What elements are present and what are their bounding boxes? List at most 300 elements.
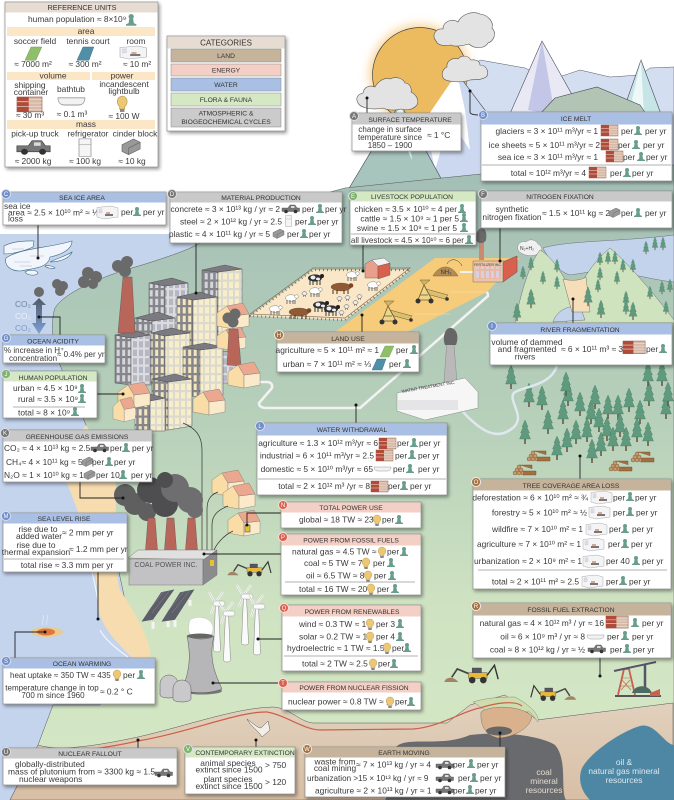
body text: ≈ 1 °C <box>427 130 450 140</box>
row total: per yr <box>410 481 432 491</box>
panel M: sea level rise <box>2 512 128 572</box>
row total: total ≈ 16 TW ≈ 20 <box>299 584 367 594</box>
panel H: land use <box>274 330 419 372</box>
row plant species: plant species <box>204 774 252 784</box>
badge R <box>472 602 480 610</box>
scene: sun <box>370 25 470 125</box>
scene: oil and gas mineral resources: oil & <box>616 757 633 767</box>
badge V: V <box>186 747 190 753</box>
row plutonium: globally-distributed <box>15 759 85 769</box>
scene: dam <box>563 277 590 312</box>
row forestry: per yr <box>636 508 658 518</box>
volume and power references: ≈ 0.1 m³ <box>57 109 88 119</box>
scene: atmospheric CO2 exchange <box>15 287 46 334</box>
row deforestation: per yr <box>635 492 657 502</box>
row waste from coal mining: per yr <box>477 760 499 770</box>
scene: lake and reservoir <box>543 235 674 282</box>
volume and power references: container <box>14 87 48 97</box>
row total: per yr <box>629 576 651 586</box>
legend: energy: ENERGY <box>212 68 241 74</box>
row total <box>511 167 654 178</box>
row total: per <box>610 168 622 178</box>
row animal species: > 750 <box>265 760 287 770</box>
scene: ammonia pile: NH₃ <box>440 270 452 276</box>
panel R: fossil fuel extraction <box>472 602 671 658</box>
scene: fertilizer factory: FERTILIZER INC. <box>474 263 502 267</box>
badge C <box>2 190 10 198</box>
badge F <box>478 190 488 198</box>
volume and power references: ≈ 100 W <box>108 111 140 121</box>
row all livestock: all livestock ≈ 4.5 × 10¹⁰ ≈ 6 per <box>351 236 464 245</box>
mass band <box>7 119 155 129</box>
scene: solar panels <box>141 589 195 629</box>
heading: LAND USE <box>331 336 365 343</box>
area band <box>7 26 155 36</box>
panel S: ocean warming <box>2 656 155 704</box>
row total: total ≈ 2 TW ≈ 2.5 <box>302 658 368 668</box>
heading: HUMAN POPULATION <box>18 375 88 382</box>
row agriculture: per <box>608 539 620 549</box>
badge O: O <box>474 480 479 486</box>
row nuclear power: per <box>395 696 407 706</box>
volume and power bands: volume <box>40 70 67 80</box>
row nuclear power: nuclear power ≈ 0.8 TW ≈ 1 <box>288 696 391 706</box>
row wildfire: per yr <box>632 524 654 534</box>
mass references: ≈ 100 kg <box>69 156 101 166</box>
row natural gas <box>292 546 408 558</box>
row deforestation: per <box>613 492 625 502</box>
row forestry: forestry ≈ 5 × 10¹⁰ m² ≈ ½ <box>492 508 587 518</box>
scene: sea ice <box>4 241 72 275</box>
scene: center pivot irrigators <box>380 280 485 324</box>
row agriculture: agriculture ≈ 5 × 10¹¹ m² ≈ 1 <box>276 345 379 355</box>
row total: per yr <box>632 168 654 178</box>
row urbanization: per yr <box>480 773 502 783</box>
scene: oil and gas mineral resources: resources <box>606 775 642 785</box>
row animal species: extinct since 1500 <box>195 764 263 774</box>
row H+ concentration: ≈ 0.4% per yr <box>57 350 105 359</box>
row plant species: > 120 <box>265 777 287 787</box>
badge O <box>472 478 480 486</box>
row synthetic nitrogen fixation: ≈ 1.5 × 10¹¹ kg ≈ 2 <box>542 208 610 218</box>
row plastic: per <box>287 229 299 239</box>
scene: oil pump jack <box>614 662 661 697</box>
scene: brown ground <box>10 695 673 800</box>
badge K: K <box>3 431 7 437</box>
row agriculture: per yr <box>475 786 497 796</box>
scene: fossil bone <box>247 719 270 737</box>
row plant species: extinct since 1500 <box>195 781 263 791</box>
legend: atmospheric and biogeochemical cycles: ATMOSPHERIC & <box>199 110 254 118</box>
row ice sheets: per yr <box>643 140 665 150</box>
heading: POWER FROM FOSSIL FUELS <box>303 538 399 544</box>
row thermal expansion <box>2 540 128 557</box>
row hydroelectric: hydroelectric ≈ 1 TW ≈ 1.5 <box>287 643 385 653</box>
badge C: C <box>4 192 9 198</box>
badge P: P <box>281 535 285 541</box>
badge S <box>2 656 10 666</box>
heading: RIVER FRAGMENTATION <box>540 327 620 334</box>
row cattle: cattle ≈ 1.5 × 10⁹ ≈ 1 per 5 <box>360 214 459 224</box>
row plastic: per yr <box>309 229 331 239</box>
badge T: T <box>281 681 285 687</box>
body text: change in surface <box>358 125 422 134</box>
row CH4: per yr <box>114 457 136 467</box>
row wildfire: wildfire ≈ 7 × 10¹⁰ m² ≈ 1 <box>491 524 583 534</box>
row glaciers <box>495 125 667 136</box>
badge I: I <box>491 324 493 330</box>
panel Q: power from renewables <box>280 604 421 671</box>
row sea ice: sea ice ≈ 3 × 10¹¹ m³/yr ≈ 1 <box>498 152 598 162</box>
volume and power references: incandescent <box>99 79 149 89</box>
row solar <box>299 632 404 643</box>
row total <box>302 658 398 670</box>
row urbanization: per yr <box>642 556 664 566</box>
panel I: river fragmentation <box>488 322 672 365</box>
row total: total ≈ 2 × 10¹¹ m² ≈ 2.5 <box>492 576 579 586</box>
row total: total ≈ 2 × 10¹² m³ /yr ≈ 8 <box>278 481 370 491</box>
row agriculture: per yr <box>631 539 653 549</box>
panel K: greenhouse gas emissions <box>0 428 154 482</box>
row agriculture <box>477 538 653 551</box>
scene: atmospheric CO2 exchange: CO₂ <box>15 311 31 321</box>
scene: roads <box>257 290 488 408</box>
row added water: rise due to <box>18 524 58 534</box>
row global <box>299 514 403 526</box>
row dammed rivers <box>491 337 667 362</box>
row waste from coal mining: per <box>453 760 465 770</box>
badge R: R <box>474 604 479 610</box>
badge W: W <box>304 747 310 753</box>
row natural gas: per yr <box>642 618 664 628</box>
row coal: coal ≈ 5 TW ≈ 7 <box>304 558 363 568</box>
heading: NUCLEAR FALLOUT <box>58 751 122 758</box>
scene: water treatment plant: WATER TREATMENT INC. <box>401 380 456 394</box>
scene: forested hills <box>515 248 674 323</box>
row CO2 <box>4 443 154 453</box>
volume and power references: lightbulb <box>108 86 140 96</box>
scene: oil and gas mineral resources: natural gas mineral <box>588 766 660 776</box>
body text: temperature since <box>358 133 423 142</box>
volume and power references: shipping <box>14 80 46 90</box>
row thermal expansion: rise due to <box>16 540 56 550</box>
badge L: L <box>258 424 262 430</box>
area band: area <box>78 26 95 36</box>
row urbanization: per 40 <box>606 556 630 566</box>
scene: houses and second smokestack <box>113 303 260 536</box>
scene: river and water pipe <box>463 366 557 434</box>
row waste from coal mining: coal mining <box>314 763 357 773</box>
row oil: oil ≈ 6.5 TW ≈ 8 <box>306 570 365 580</box>
heading: LIVESTOCK POPULATION <box>371 194 453 201</box>
badge P <box>278 532 288 542</box>
row wildfire <box>491 523 654 536</box>
row agriculture: agriculture ≈ 1.3 × 10¹² m³/yr ≈ 6 <box>258 438 378 448</box>
scene: coal power plant smoke <box>114 472 203 521</box>
row total: per <box>606 576 618 586</box>
row agriculture <box>315 785 497 796</box>
area references: room <box>126 36 146 46</box>
scene: open pit mine <box>473 697 538 738</box>
scene: ocean <box>0 234 674 800</box>
heading: SEA ICE AREA <box>59 195 105 202</box>
heading: POWER FROM RENEWABLES <box>305 609 400 616</box>
row dammed rivers: ≈ 6 × 10¹¹ m³ ≈ 3 <box>561 344 623 354</box>
row H+ concentration: % increase in H⁺ <box>4 346 64 355</box>
row oil <box>500 631 654 642</box>
row domestic: domestic ≈ 5 × 10¹⁰ m³/yr ≈ 65 <box>261 464 373 474</box>
panel: categories legend <box>167 36 285 131</box>
row natural gas: per <box>387 546 399 556</box>
row ice sheets: ice sheets ≈ 5 × 10¹¹ m³/yr ≈ 2 <box>489 140 600 150</box>
panel D: material production <box>168 190 347 243</box>
row sea ice area loss: sea ice <box>4 201 31 211</box>
area references <box>14 36 151 69</box>
row coal: per <box>373 558 385 568</box>
row forestry: per <box>613 508 625 518</box>
badge A: A <box>352 114 356 120</box>
row domestic <box>261 464 440 474</box>
row industrial: industrial ≈ 6 × 10¹¹ m³/yr ≈ 2.5 <box>260 450 374 460</box>
row glaciers: glaciers ≈ 3 × 10¹¹ m³/yr ≈ 1 <box>495 126 598 136</box>
scene: trees <box>506 237 674 463</box>
badge G: G <box>4 336 9 342</box>
row urbanization <box>474 555 664 568</box>
heading: MATERIAL PRODUCTION <box>221 195 301 202</box>
badge B <box>478 110 488 120</box>
row urbanization <box>307 773 502 783</box>
scene: ammonia pile <box>433 260 474 276</box>
heading: EARTH MOVING <box>378 750 430 757</box>
scene: coal mineral resources <box>385 733 566 800</box>
row agriculture: agriculture ≈ 7 × 10¹⁰ m² ≈ 1 <box>477 539 581 549</box>
panel T: power from nuclear fission <box>278 678 421 710</box>
scene: city skyline <box>115 265 242 431</box>
row agriculture <box>258 438 441 449</box>
row dammed rivers: and fragmented <box>498 344 557 354</box>
heading: categories: CATEGORIES <box>200 38 252 48</box>
row N2O: per yr <box>131 470 153 480</box>
scene: oil and gas mineral resources <box>580 726 674 800</box>
row H+ concentration: concentration <box>9 354 57 363</box>
row agriculture: per <box>397 438 409 448</box>
row thermal expansion: ≈ 1.2 mm per yr <box>69 544 128 554</box>
row urban <box>283 359 411 370</box>
badge M: M <box>4 514 8 520</box>
row total <box>278 481 432 492</box>
mass references: ≈ 2000 kg <box>15 156 52 166</box>
row oil: per <box>374 570 386 580</box>
panel C: sea ice area <box>2 190 166 225</box>
row animal species <box>195 758 287 774</box>
volume and power references <box>14 79 149 121</box>
row added water: added water <box>16 531 62 541</box>
row coal <box>490 644 655 654</box>
area references: soccer field <box>14 36 57 46</box>
scene: power lines <box>183 423 233 553</box>
row synthetic nitrogen fixation: per <box>621 208 633 218</box>
heading: reference units: REFERENCE UNITS <box>48 3 117 12</box>
scene: land <box>10 165 674 800</box>
scene: N2+H2 cloud: N₂+H₂ <box>520 246 534 252</box>
area references: ≈ 10 m² <box>123 59 151 69</box>
row total: total ≈ 10¹² m³/yr ≈ 4 <box>511 168 586 178</box>
volume and power bands <box>7 70 155 80</box>
panel G: ocean acidity <box>2 334 105 363</box>
badge Q: Q <box>282 606 287 612</box>
row steel: steel ≈ 2 × 10¹² kg / yr ≈ 2.5 <box>180 216 282 226</box>
row coal: per <box>610 644 622 654</box>
row natural gas: natural gas ≈ 4.5 TW ≈ 6 <box>292 546 384 556</box>
row CO2: per <box>110 443 122 453</box>
heading: POWER FROM NUCLEAR FISSION <box>299 685 409 692</box>
row concrete: per yr <box>325 204 347 214</box>
row sea ice area loss: per <box>121 207 133 217</box>
scene: fertilizer factory <box>473 228 517 282</box>
row CH4: CH₄≈ 4 × 10¹¹ kg ≈ 5 <box>6 457 83 467</box>
badge B: B <box>481 113 485 119</box>
scene: atmospheric CO2 exchange: CO₂ <box>15 323 31 333</box>
volume and power references: ≈ 30 m³ <box>16 110 44 120</box>
row total: total ≈ 8 × 10⁹ <box>18 408 71 418</box>
row total: per <box>377 584 389 594</box>
row solar: per 4 <box>376 632 395 642</box>
row CO2: CO₂ ≈ 4 × 10¹³ kg ≈ 2.5 <box>4 443 91 453</box>
row concrete: concrete ≈ 3 × 10¹³ kg / yr ≈ 2 <box>170 204 280 214</box>
row added water: ≈ 2 mm per yr <box>62 528 114 538</box>
row sea ice area loss: per yr <box>143 207 165 217</box>
row N2O <box>4 470 153 480</box>
scene: barn <box>365 258 390 279</box>
panel V: contemporary extinction <box>184 744 295 794</box>
row rural: rural ≈ 3.5 × 10⁹ <box>18 394 79 404</box>
scene: ocean heat spot <box>31 615 63 637</box>
legend: flora and fauna: FLORA & FAUNA <box>200 97 253 104</box>
row oil: oil ≈ 6 × 10⁹ m³ / yr ≈ 8 <box>500 632 585 642</box>
mass references: pick-up truck <box>11 128 60 138</box>
row sea ice area loss: loss <box>8 214 23 224</box>
panel O: tree coverage area loss <box>472 478 671 589</box>
badge S: S <box>4 659 8 665</box>
scene: log piles <box>513 451 654 475</box>
area references: ≈ 300 m² <box>68 59 102 69</box>
badge H: H <box>277 333 281 339</box>
area references: ≈ 7000 m² <box>14 59 52 69</box>
badge Q <box>280 604 288 612</box>
volume and power references: bathtub <box>57 84 85 94</box>
badge N <box>278 500 288 510</box>
volume and power bands: power <box>111 70 134 80</box>
row urban: urban ≈ 4.5 × 10⁹ <box>13 383 78 393</box>
row sea ice: per <box>623 152 635 162</box>
row total: total rise ≈ 3.3 mm per yr <box>21 560 113 570</box>
panel J: human population <box>2 370 97 418</box>
legend: water: WATER <box>214 82 238 89</box>
heading: SURFACE TEMPERATURE <box>368 117 452 124</box>
row concrete <box>170 204 347 214</box>
row forestry <box>492 506 658 519</box>
row CO2: per yr <box>132 443 154 453</box>
heading: OCEAN ACIDITY <box>27 338 79 346</box>
row coal: coal ≈ 8 × 10¹² kg / yr ≈ ½ <box>490 644 585 654</box>
row synthetic nitrogen fixation: per yr <box>645 208 667 218</box>
row concrete: per <box>302 204 314 214</box>
row urbanization: per <box>458 773 470 783</box>
body text: 1850 – 1900 <box>368 141 413 150</box>
row glaciers: per <box>621 126 633 136</box>
heading: TREE COVERAGE AREA LOSS <box>523 483 620 490</box>
mass references: refrigerator <box>68 128 109 138</box>
row temperature change: temperature change in top <box>5 684 99 692</box>
row coal: per yr <box>633 644 655 654</box>
heading: NITROGEN FIXATION <box>526 194 594 201</box>
row chicken: chicken ≈ 3.5 × 10¹⁰ ≈ 4 per <box>354 204 457 214</box>
row CH4: per <box>92 457 104 467</box>
panel: reference units <box>5 2 158 167</box>
badge N: N <box>281 503 285 509</box>
mass references: ≈ 10 kg <box>118 156 146 166</box>
row deforestation: deforestation ≈ 6 × 10¹⁰ m² ≈ ¾ <box>472 492 589 502</box>
scene: water treatment plant <box>397 328 478 420</box>
heading: GREENHOUSE GAS EMISSIONS <box>26 434 129 441</box>
row dammed rivers: volume of dammed <box>491 337 563 347</box>
badge J: J <box>4 372 8 378</box>
badge U: U <box>4 750 8 756</box>
row deforestation <box>472 491 657 504</box>
row natural gas <box>480 616 664 628</box>
row H+ concentration <box>4 346 105 363</box>
row wind <box>298 619 404 630</box>
panel W: earth moving <box>302 744 505 797</box>
row domestic: per yr <box>418 464 440 474</box>
row urbanization: urbanization ≈ 2 × 10⁹ m² ≈ 1 <box>474 556 582 566</box>
panel A: surface temperature <box>350 112 461 151</box>
row agriculture: agriculture ≈ 2 × 10¹³ kg / yr ≈ 1 <box>315 786 432 796</box>
row industrial <box>260 450 440 461</box>
area references: tennis court <box>66 36 110 46</box>
legend: atmospheric and biogeochemical cycles: BIOGEOCHEMICAL CYCLES <box>181 119 271 126</box>
row heat uptake: heat uptake ≈ 350 TW ≈ 435 <box>10 671 111 680</box>
row domestic: per <box>393 464 405 474</box>
scene: livestock pen <box>250 268 410 320</box>
row plutonium: nuclear weapons <box>19 774 82 784</box>
row glaciers: per yr <box>645 126 667 136</box>
row synthetic nitrogen fixation: nitrogen fixation <box>482 212 542 222</box>
row dammed rivers: rivers <box>515 352 535 362</box>
row steel <box>180 216 339 226</box>
mass references: cinder block <box>113 128 158 138</box>
row sea ice: per yr <box>646 152 668 162</box>
row total: per <box>388 481 400 491</box>
scene: clouds <box>357 13 495 110</box>
row temperature change: ≈ 0.2 ° C <box>100 686 133 696</box>
panel L: water withdrawal <box>256 422 447 495</box>
row oil: per <box>607 632 619 642</box>
row steel: per <box>295 216 307 226</box>
scene: wind turbines <box>209 585 265 662</box>
badge I <box>488 322 496 330</box>
panel U: nuclear fallout <box>2 748 177 785</box>
row temperature change: 700 m since 1960 <box>21 691 85 700</box>
row heat uptake: per <box>123 670 135 680</box>
heading: OCEAN WARMING <box>53 661 111 668</box>
row plastic: plastic ≈ 4 × 10¹¹ kg / yr ≈ 5 <box>169 229 270 239</box>
row natural gas: natural gas ≈ 4 × 10¹² m³ / yr ≈ 16 <box>480 618 604 628</box>
mass references <box>11 128 158 166</box>
row agriculture: per <box>396 345 408 355</box>
row N2O: per 10 <box>96 470 120 480</box>
row animal species: animal species <box>200 758 256 768</box>
